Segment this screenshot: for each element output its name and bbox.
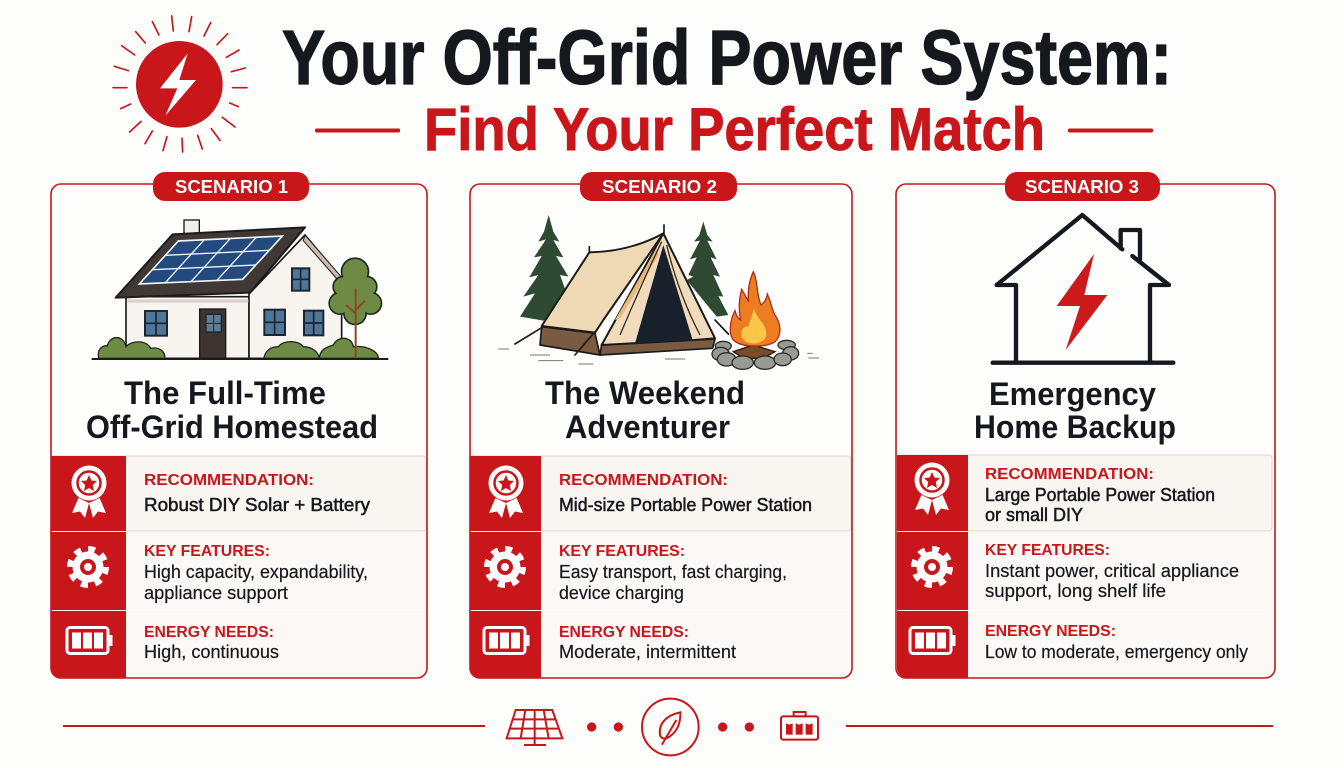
icon: battery case [781, 712, 818, 740]
row: energy needs: ENERGY NEEDS: [559, 624, 689, 641]
row: recommendation: Mid-size Portable Power Station [559, 495, 812, 515]
heading: The Full-Time [124, 375, 326, 411]
heading: The Weekend [545, 375, 745, 411]
row: key features: Easy transport, fast charging, [559, 562, 787, 582]
row: energy needs [51, 611, 426, 678]
panel: scenario 3 [896, 172, 1275, 678]
subtitle: Find Your Perfect Match [424, 96, 1045, 163]
row: energy needs [897, 611, 1272, 678]
row: recommendation: Large Portable Power Station [985, 485, 1215, 505]
row: key features: appliance support [144, 583, 288, 603]
heading [545, 375, 745, 445]
row: key features [897, 532, 1272, 610]
badge: SCENARIO 1 [175, 177, 288, 197]
tree crown outline [328, 257, 382, 325]
badge [1005, 172, 1160, 201]
row: key features [51, 532, 426, 610]
row: key features: KEY FEATURES: [985, 542, 1110, 559]
badge: SCENARIO 2 [602, 177, 717, 197]
illustration: house outline with lightning bolt [993, 215, 1173, 363]
row: energy needs: ENERGY NEEDS: [985, 623, 1116, 640]
row: recommendation [897, 455, 1272, 531]
row: recommendation [51, 456, 426, 531]
heading: Emergency [989, 376, 1156, 412]
icon: award ribbon [72, 466, 106, 518]
icon: leaf in circle [642, 699, 699, 755]
icon: solar panel [507, 710, 562, 745]
heading: Home Backup [974, 409, 1176, 445]
row: key features: KEY FEATURES: [144, 543, 270, 560]
icon: award ribbon [914, 462, 950, 515]
badge: SCENARIO 3 [1025, 177, 1139, 197]
row: key features: device charging [559, 583, 684, 603]
illustration: tent, trees and campfire [498, 215, 819, 369]
row: energy needs: ENERGY NEEDS: [144, 624, 274, 641]
row: key features: High capacity, expandability, [144, 562, 368, 582]
badge [153, 172, 309, 201]
row: energy needs: High, continuous [144, 642, 279, 662]
heading: Off-Grid Homestead [86, 409, 378, 445]
heading [86, 375, 378, 445]
row: recommendation: or small DIY [985, 505, 1083, 525]
row: key features: support, long shelf life [985, 581, 1166, 601]
footer icon strip [63, 699, 1273, 755]
illustration: house with solar panels [92, 220, 388, 360]
stones [712, 340, 799, 361]
icon: sun with lightning bolt [113, 16, 247, 152]
panel: scenario 1 [51, 172, 427, 678]
row: energy needs: Low to moderate, emergency only [985, 642, 1248, 662]
row: recommendation [470, 456, 851, 531]
row: key features [470, 532, 851, 610]
title: Your Off-Grid Power System: [282, 15, 1172, 101]
row: recommendation: Robust DIY Solar + Battery [144, 495, 370, 515]
panel: scenario 2 [470, 172, 852, 678]
badge [580, 172, 737, 201]
row: energy needs: Moderate, intermittent [559, 642, 736, 662]
icon: gear [70, 549, 106, 585]
row: key features: Instant power, critical appliance [985, 561, 1239, 581]
row: recommendation: RECOMMENDATION: [985, 466, 1154, 483]
icon: battery [910, 628, 956, 654]
row: key features: KEY FEATURES: [559, 543, 685, 560]
heading [974, 376, 1176, 445]
row: energy needs [470, 611, 851, 678]
heading: Adventurer [565, 409, 730, 445]
row: recommendation: RECOMMENDATION: [144, 472, 314, 489]
icon: gear [914, 549, 950, 585]
icon: battery [67, 628, 112, 654]
row: recommendation: RECOMMENDATION: [559, 472, 728, 489]
icon: gear [487, 549, 523, 585]
icon: battery [484, 628, 530, 654]
icon: award ribbon [488, 466, 524, 518]
